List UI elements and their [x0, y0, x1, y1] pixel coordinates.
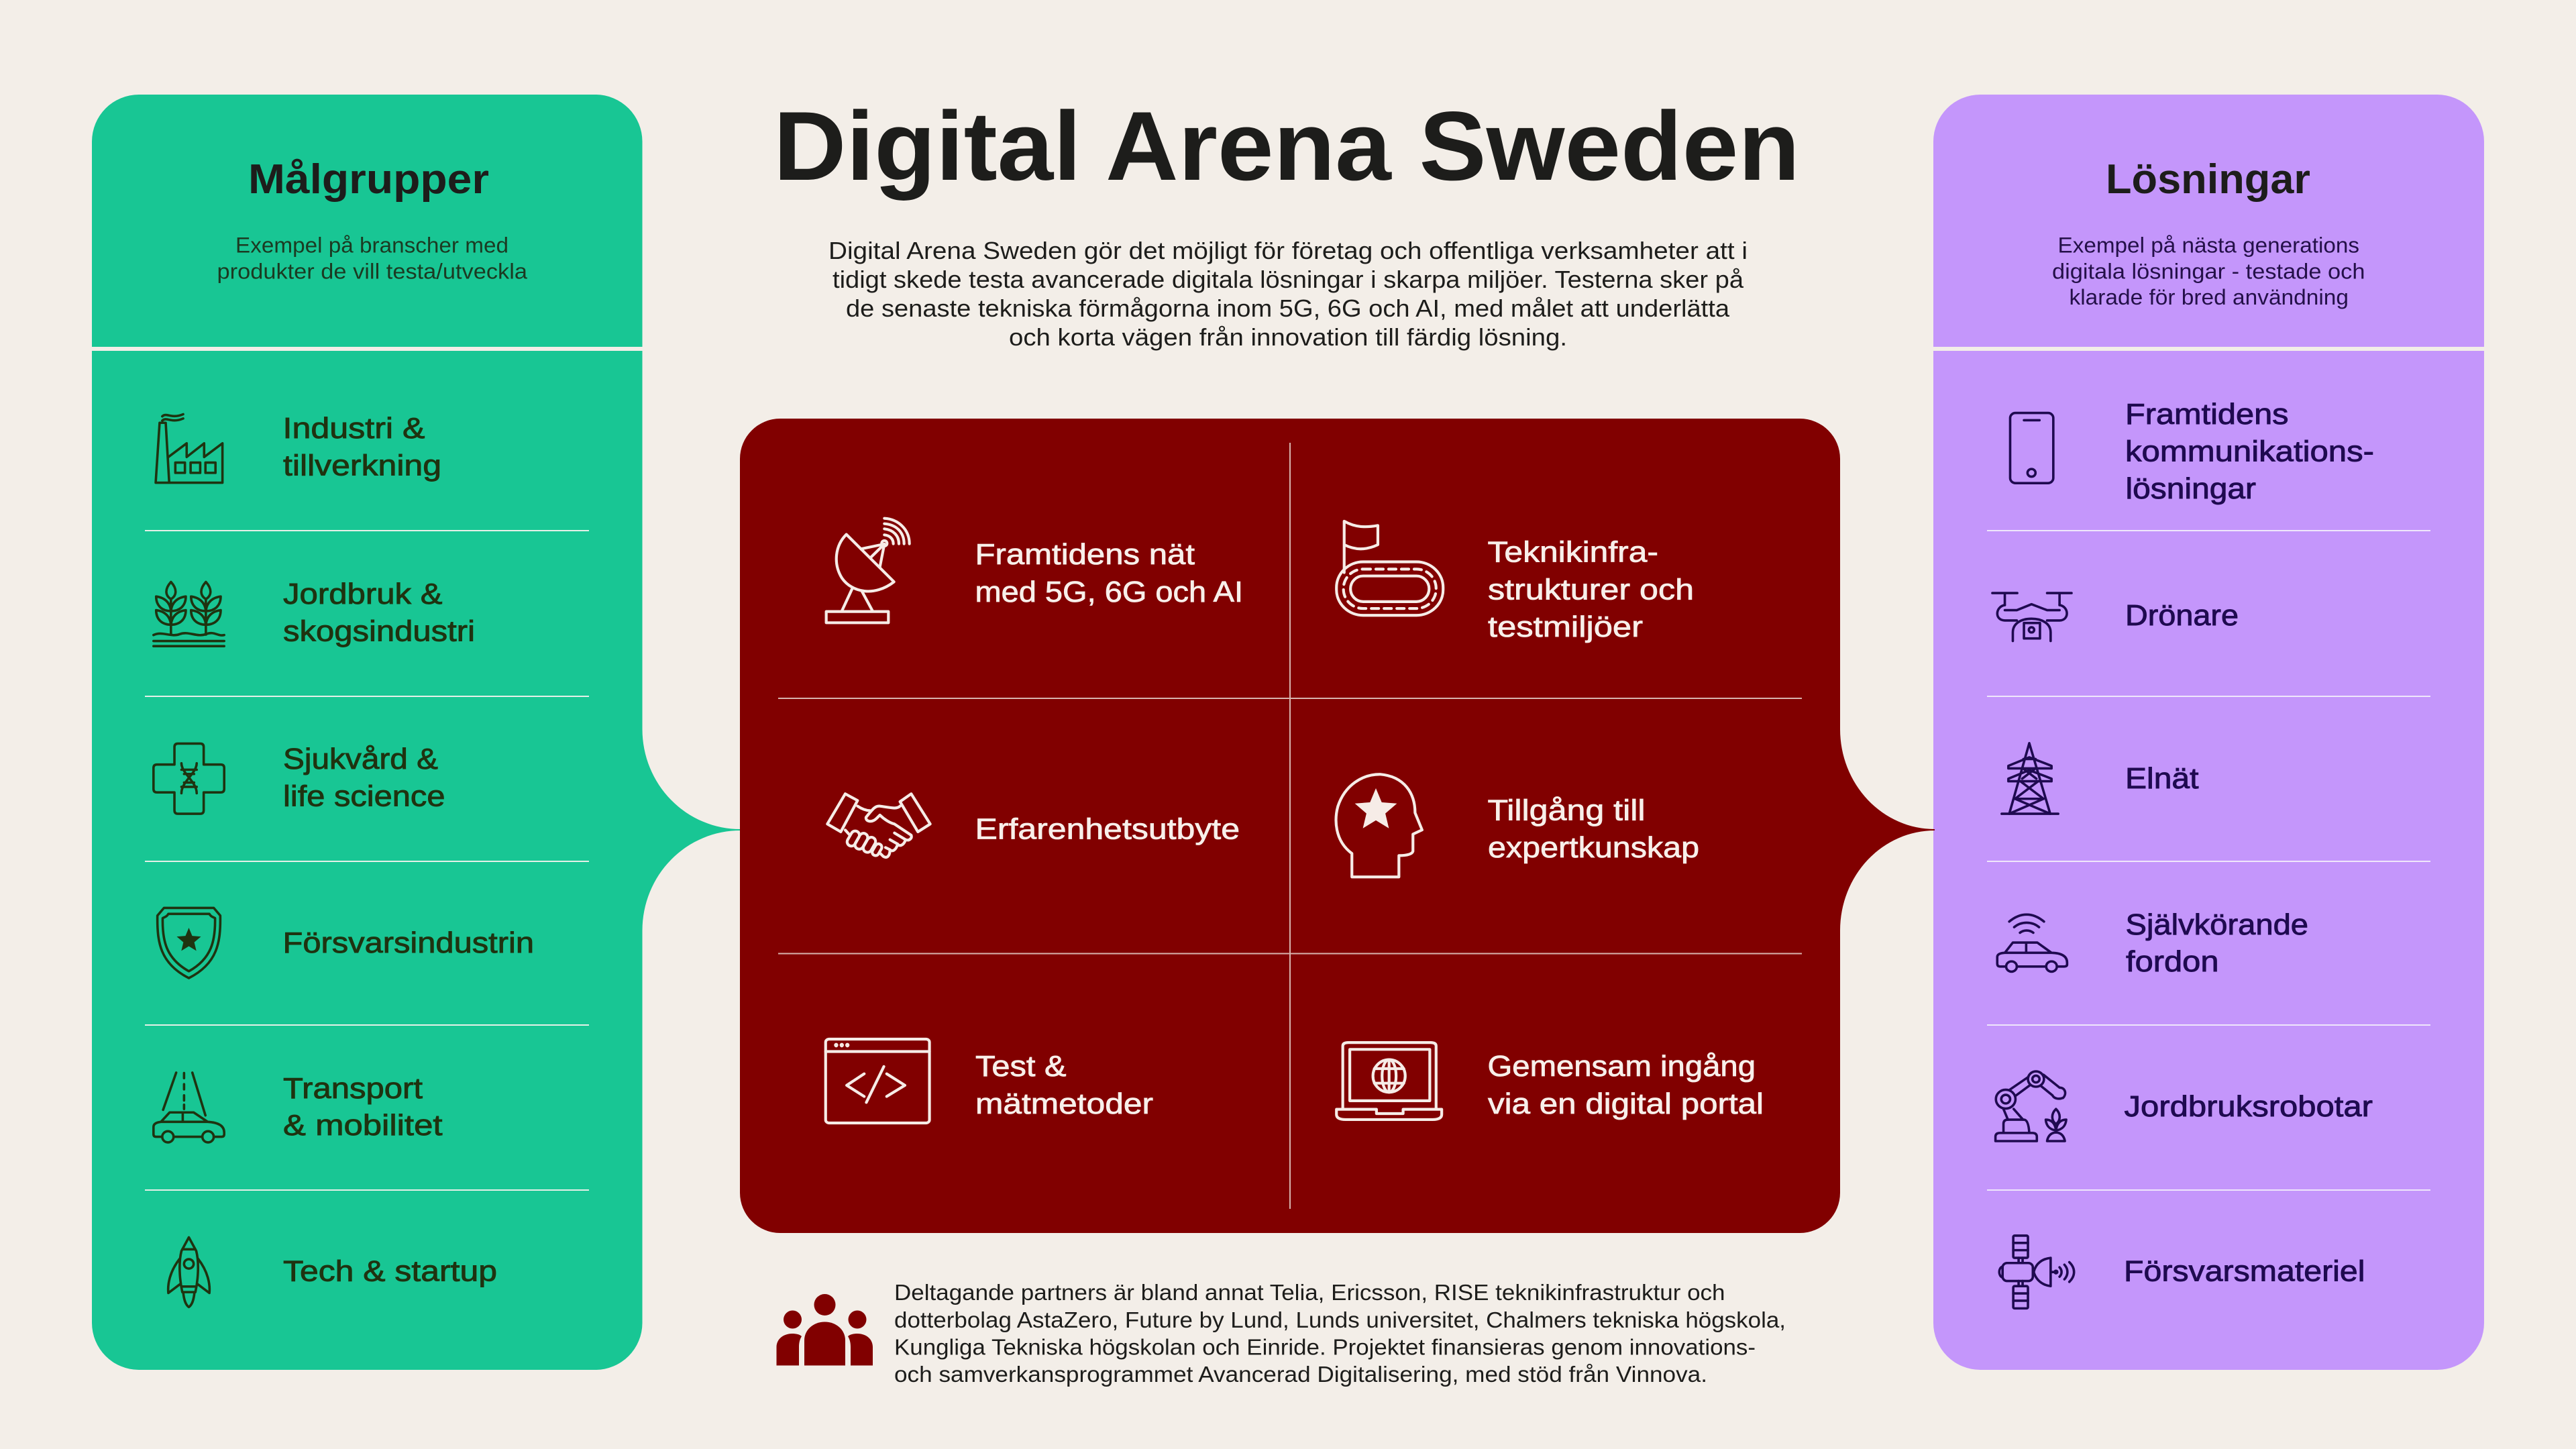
heading: lösningar: Lösningar — [2106, 156, 2310, 203]
icon: rocket — [168, 1237, 209, 1307]
title: Digital Arena Sweden — [773, 91, 1800, 201]
icon: phone — [2010, 413, 2053, 483]
label: teknikinfrastrukturer: strukturer och — [1488, 573, 1694, 606]
item: jordbruk — [154, 578, 475, 648]
panel: målgrupper — [92, 95, 741, 1370]
icon: road and car — [154, 1073, 224, 1142]
icon: laptop with globe — [1336, 1042, 1442, 1120]
label: expertkunskap: Tillgång till — [1488, 794, 1645, 826]
icon: code window — [826, 1039, 930, 1123]
label: teknikinfrastrukturer: testmiljöer — [1488, 610, 1643, 643]
item: tech — [168, 1237, 497, 1307]
label: sjukvård: life science — [283, 780, 445, 813]
item: drönare — [1992, 593, 2239, 641]
label: framtidens nät — [975, 538, 1243, 608]
icon: test track with flag — [1336, 521, 1443, 615]
label: expertkunskap — [1488, 794, 1699, 864]
text: lösningar intro: Exempel på nästa generations — [2058, 233, 2359, 258]
label: kommunikation: kommunikations- — [2125, 435, 2374, 468]
text: målgrupper intro — [217, 233, 528, 283]
icon: head with star — [1336, 774, 1422, 877]
label: erfarenhetsutbyte: Erfarenhetsutbyte — [975, 813, 1240, 845]
icon: factory — [156, 414, 223, 483]
item: digital portal — [1336, 1042, 1764, 1120]
label: framtidens nät: Framtidens nät — [975, 538, 1195, 571]
label: kommunikation: lösningar — [2125, 472, 2256, 505]
text: introduction — [828, 237, 1748, 351]
icon: robot arm with plant — [1996, 1071, 2066, 1141]
icon: medical cross with dna — [154, 743, 224, 814]
label: försvarsmateriel: Försvarsmateriel — [2124, 1254, 2365, 1288]
item: självkörande — [1997, 908, 2308, 978]
label: framtidens nät: med 5G, 6G och AI — [975, 576, 1243, 608]
text: introduction: tidigt skede testa avancerade digitala lösningar i skarpa miljöer. Testerna sker på — [833, 266, 1744, 293]
text: målgrupper intro: Exempel på branscher med — [235, 233, 508, 258]
item: transport — [154, 1072, 443, 1142]
icon: shield with star — [158, 908, 220, 978]
label: digital portal — [1488, 1050, 1764, 1120]
label: mätmetoder: mätmetoder — [975, 1087, 1153, 1120]
icon: plants — [154, 582, 224, 646]
item: mätmetoder — [826, 1039, 1153, 1123]
text: partners: och samverkansprogrammet Avancerad Digitalisering, med stöd från Vinnova. — [894, 1362, 1707, 1387]
icon: pylon — [2002, 743, 2058, 814]
label: kommunikation: Framtidens — [2125, 398, 2289, 431]
text: lösningar intro — [2052, 233, 2365, 309]
item: industri — [156, 412, 441, 483]
text: målgrupper intro: produkter de vill testa/utveckla — [217, 259, 528, 283]
text: lösningar intro: klarade för bred användning — [2069, 285, 2349, 309]
label: jordbruksrobotar: Jordbruksrobotar — [2124, 1090, 2373, 1123]
label: digital portal: via en digital portal — [1488, 1087, 1764, 1120]
label: teknikinfrastrukturer: Teknikinfra- — [1488, 535, 1658, 569]
label: sjukvård: Sjukvård & — [283, 743, 438, 775]
label: expertkunskap: expertkunskap — [1488, 831, 1699, 864]
label: sjukvård — [283, 743, 445, 813]
label: självkörande — [2125, 908, 2308, 978]
icon: connected car — [1997, 914, 2067, 971]
label: transport: Transport — [283, 1072, 423, 1105]
label: jordbruk — [283, 578, 475, 648]
text: introduction: Digital Arena Sweden gör det möjligt för företag och offentliga verksamheter att i — [828, 237, 1748, 264]
panel: central capabilities — [740, 419, 1935, 1233]
label: försvarsindustrin: Försvarsindustrin — [283, 926, 534, 959]
label: självkörande: Självkörande — [2125, 908, 2308, 941]
icon: partners group — [777, 1294, 873, 1366]
label: transport: & mobilitet — [283, 1109, 443, 1142]
text: introduction: de senaste tekniska förmågorna inom 5G, 6G och AI, med målet att underlätta — [846, 294, 1730, 322]
item: teknikinfrastrukturer — [1336, 521, 1694, 643]
icon: satellite — [1999, 1236, 2074, 1308]
text: lösningar intro: digitala lösningar - testade och — [2052, 259, 2365, 283]
label: kommunikation — [2125, 398, 2374, 505]
label: mätmetoder: Test & — [975, 1050, 1067, 1083]
label: jordbruk: skogsindustri — [283, 614, 475, 648]
label: självkörande: fordon — [2126, 945, 2219, 978]
item: kommunikation — [2010, 398, 2374, 505]
label: industri: Industri & — [283, 412, 425, 445]
label: tech: Tech & startup — [283, 1254, 497, 1288]
item: elnät — [2002, 743, 2199, 814]
icon: handshake — [827, 794, 930, 857]
item: framtidens nät — [826, 519, 1243, 623]
item: expertkunskap — [1336, 774, 1699, 877]
text: partners — [894, 1280, 1786, 1387]
label: elnät: Elnät — [2125, 762, 2199, 795]
label: industri: tillverkning — [283, 449, 441, 482]
label: teknikinfrastrukturer — [1488, 535, 1694, 643]
label: jordbruk: Jordbruk & — [283, 578, 443, 610]
item: jordbruksrobotar — [1996, 1071, 2373, 1141]
item: sjukvård — [154, 743, 445, 814]
text: introduction: och korta vägen från innovation till färdig lösning. — [1009, 323, 1567, 351]
panel: lösningar — [1933, 95, 2484, 1370]
item: försvarsindustrin — [158, 908, 534, 978]
label: digital portal: Gemensam ingång — [1488, 1050, 1756, 1083]
text: partners: Deltagande partners är bland annat Telia, Ericsson, RISE teknikinfrastruktur och — [894, 1280, 1725, 1305]
label: transport — [283, 1072, 443, 1142]
label: industri — [283, 412, 441, 482]
label: drönare: Drönare — [2125, 599, 2239, 632]
item: försvarsmateriel — [1999, 1236, 2365, 1308]
label: mätmetoder — [975, 1050, 1153, 1120]
text: partners: dotterbolag AstaZero, Future by Lund, Lunds universitet, Chalmers tekniska högskola, — [894, 1307, 1786, 1332]
item: erfarenhetsutbyte — [827, 794, 1240, 857]
icon: drone — [1992, 593, 2072, 641]
icon: satellite dish — [826, 519, 910, 623]
heading: målgrupper: Målgrupper — [248, 156, 489, 203]
text: partners: Kungliga Tekniska högskolan och Einride. Projektet finansieras genom innovations- — [894, 1335, 1756, 1359]
